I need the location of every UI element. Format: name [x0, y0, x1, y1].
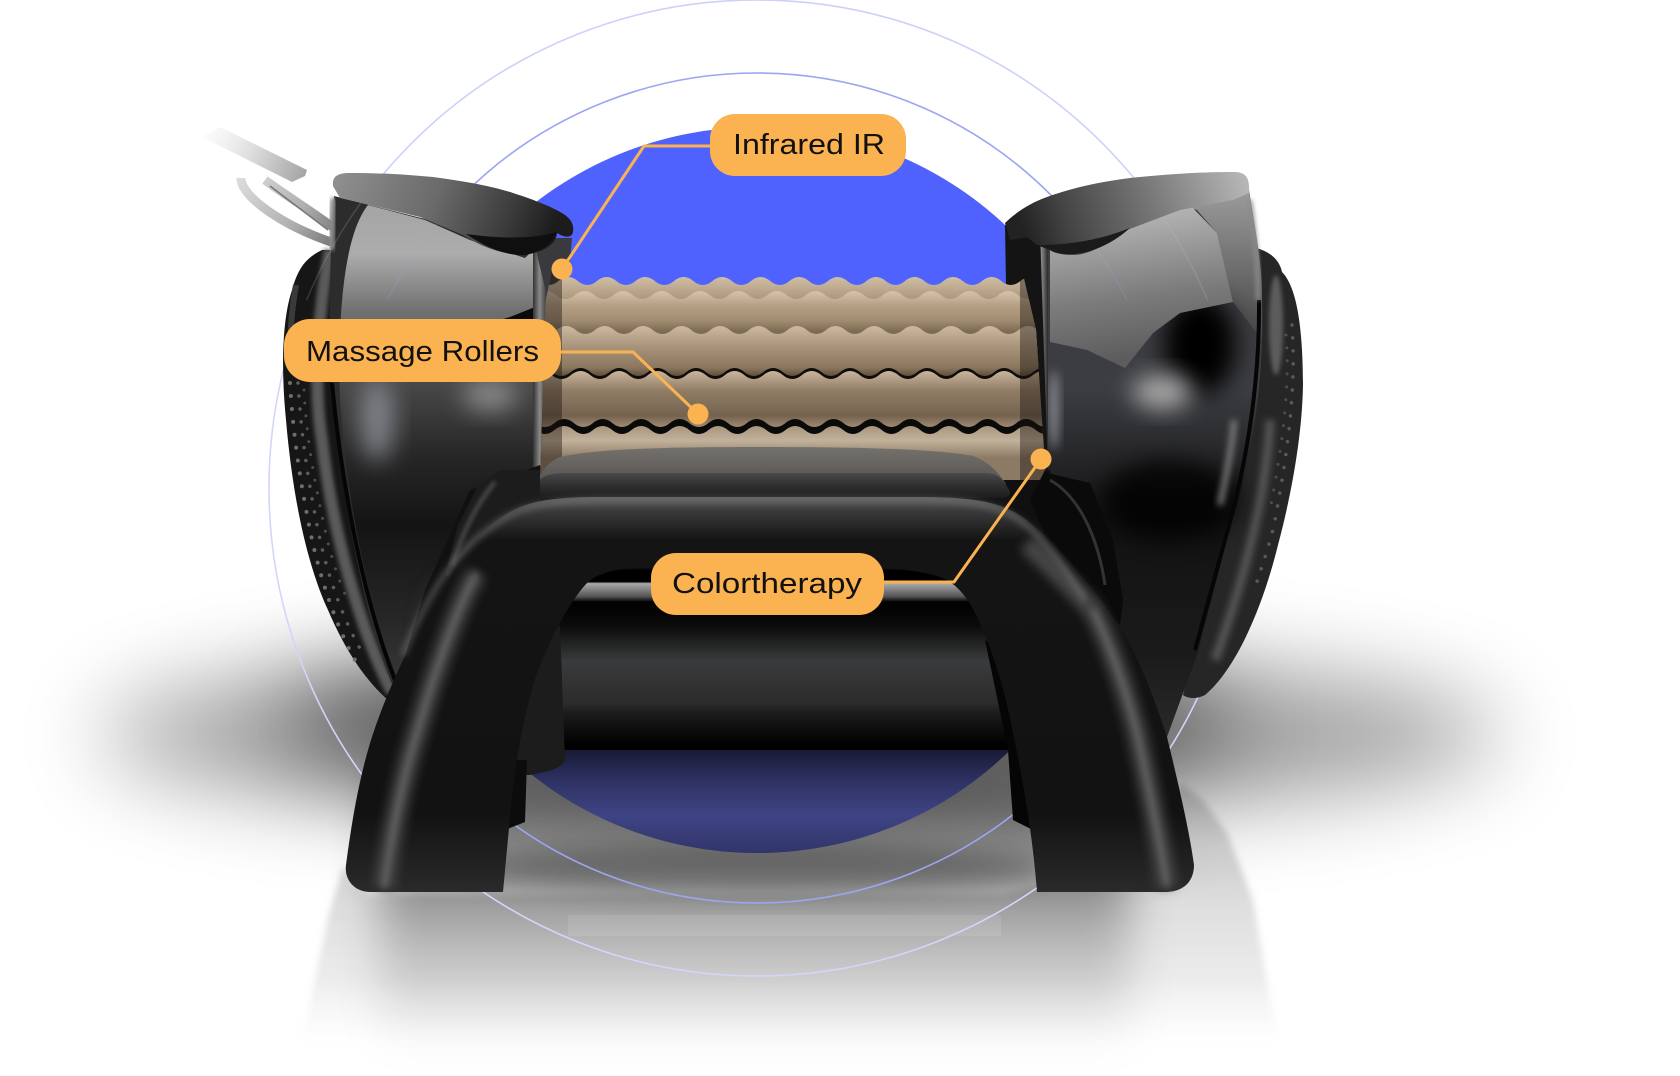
concentric rings: [269, 0, 1245, 976]
blue circle: [394, 127, 1120, 853]
faint rings over headrests: [306, 202, 1208, 300]
floor shadow: [100, 650, 1500, 1040]
side linkages: [445, 470, 1123, 625]
massage rollers: [540, 272, 1046, 480]
chrome handle: [202, 127, 334, 243]
callout: Colortherapy: Colortherapy: [672, 568, 863, 600]
callout: Infrared IR: Infrared IR: [733, 129, 885, 161]
callout: Massage Rollers: [284, 319, 708, 424]
callout: Infrared IR: [552, 114, 906, 280]
callout: Colortherapy: [651, 448, 1052, 615]
lower cavity: [505, 565, 1033, 830]
seat cushion: [533, 447, 1010, 498]
floor reflection: [300, 783, 1280, 1045]
right pod: [1036, 190, 1262, 737]
dimmed lower circle in shadow: [532, 750, 1008, 853]
left headrest: [333, 173, 573, 255]
left outer rim with perforations: [283, 250, 420, 700]
right outer rim with perforations: [1183, 248, 1303, 698]
dark gap beside rollers: [395, 225, 1110, 770]
left pod: [330, 196, 548, 700]
front arch base: [346, 497, 1194, 892]
callout: Massage Rollers: Massage Rollers: [306, 336, 539, 368]
massage chair: [202, 127, 1303, 892]
right headrest: [1005, 172, 1249, 255]
